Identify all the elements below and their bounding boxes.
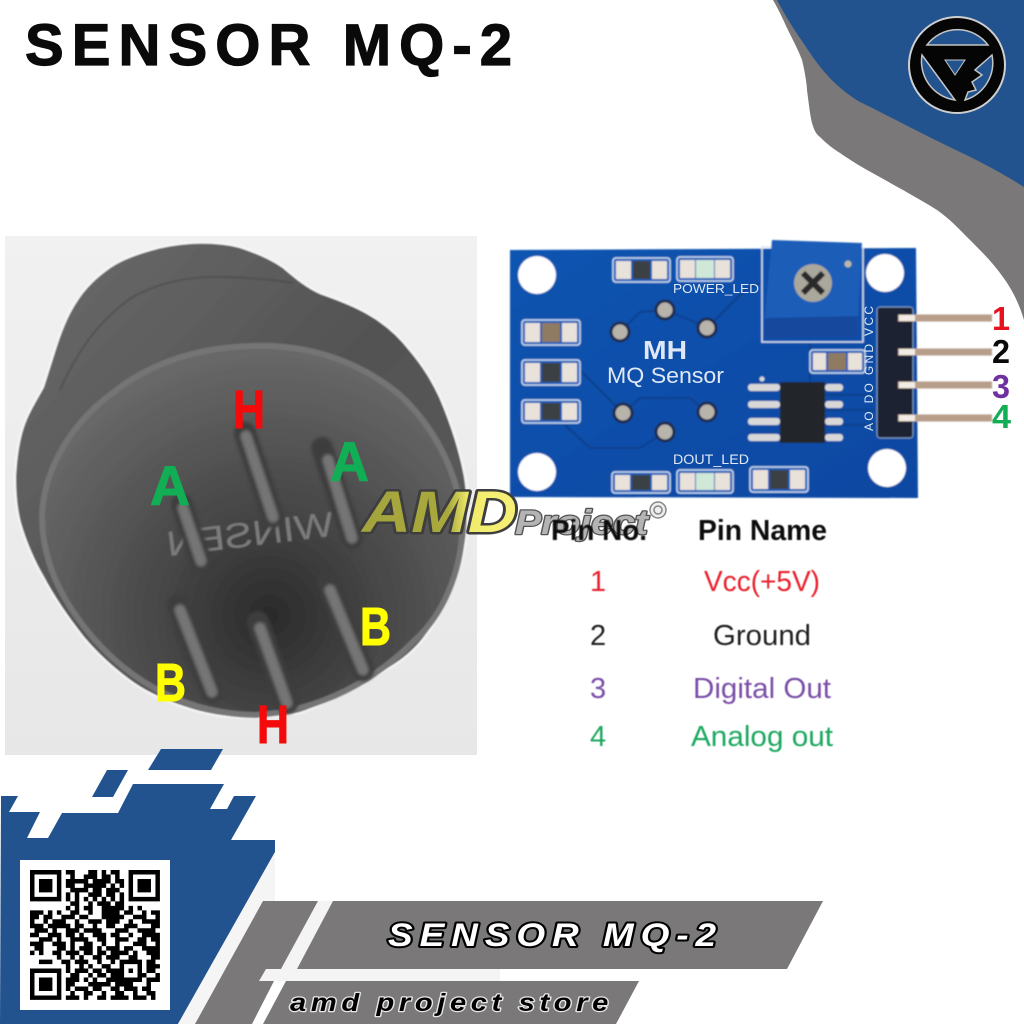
pin labels: B: [155, 653, 186, 713]
mounting holes: [518, 254, 906, 491]
banner heading: SENSOR MQ-2: [388, 917, 723, 953]
solder vias: [611, 301, 716, 441]
row 4: Analog out: [691, 721, 833, 753]
footer: blue shape with QR code: [0, 749, 275, 1024]
row 2: Ground: [713, 620, 811, 652]
pin numbers: 2: [992, 333, 1010, 370]
row 3: Digital Out: [693, 673, 831, 705]
panel: pin table: [551, 515, 833, 753]
row 1: Vcc(+5V): [704, 566, 820, 598]
pin numbers: 4: [992, 398, 1012, 435]
row 2: 2: [590, 620, 606, 652]
pin labels: B: [360, 597, 391, 657]
row 2: [590, 620, 811, 652]
icon: brand logo: [909, 17, 1005, 113]
panel: sensor photo: [5, 236, 477, 755]
footer: title banners: [178, 852, 823, 1024]
sensor body: [15, 243, 468, 718]
table header: Pin Name: [698, 515, 827, 547]
store name: amd project store: [290, 989, 613, 1017]
pin numbers: 3: [992, 368, 1010, 405]
board silkscreen text: MQ Sensor: [607, 363, 724, 388]
pin numbers: 1: [992, 300, 1010, 337]
row 3: [590, 673, 831, 705]
board silkscreen text: MH: [643, 335, 687, 365]
AMD Project watermark: [360, 480, 666, 545]
corner decoration: [773, 0, 1024, 320]
pin numbers: [992, 300, 1012, 435]
sensor pins: [178, 433, 363, 703]
pin labels: H: [233, 380, 265, 440]
board silkscreen text: POWER_LED: [673, 281, 759, 296]
table header: Pin No.: [551, 515, 647, 547]
board silkscreen text: [607, 281, 876, 467]
row 4: 4: [590, 721, 606, 753]
board silkscreen text: DOUT_LED: [673, 451, 749, 467]
row 4: [590, 721, 833, 753]
pin labels: A: [150, 454, 190, 517]
row 1: 1: [590, 566, 606, 598]
mirrored WINSEN mark: WINSEN: [164, 505, 336, 564]
board silkscreen text: AO DO GND VCC: [862, 306, 876, 431]
sensor face: [42, 346, 462, 715]
pin header: [877, 307, 992, 438]
row 3: 3: [590, 673, 606, 705]
panel: MQ sensor module board: [510, 240, 1012, 498]
AMD Project watermark: Project: [515, 504, 650, 542]
pin labels: [150, 380, 391, 755]
board traces: [565, 282, 875, 448]
title: SENSOR MQ-2: [25, 13, 512, 78]
row 1: [590, 566, 820, 598]
AMD Project watermark: AMD: [360, 480, 517, 545]
ic chip: [748, 376, 843, 443]
smd components: [522, 257, 865, 493]
pin labels: H: [257, 695, 289, 755]
potentiometer: [762, 240, 863, 342]
QR code: [20, 860, 170, 1010]
pin labels: A: [330, 430, 369, 493]
table header: [551, 515, 827, 547]
